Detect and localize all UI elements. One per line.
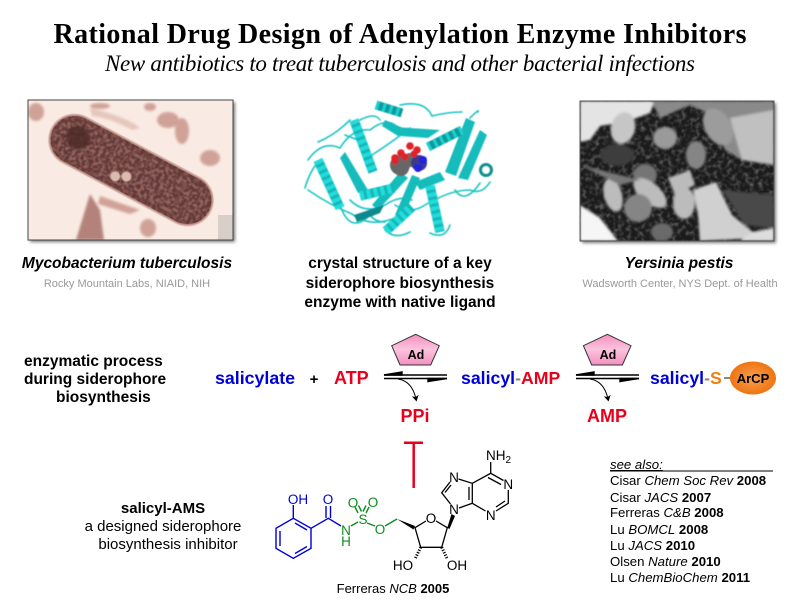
caption: Mycobacterium tuberculosis: Mycobacterium tuberculosis (22, 255, 232, 272)
ribose: O (426, 511, 436, 526)
references: see also: Cisar JACS 2007 (610, 490, 711, 505)
enzyme: Ad pentagon 1: Ad (408, 348, 424, 362)
adenine (442, 448, 513, 523)
salicyl moiety: OH (288, 492, 308, 507)
reactant: ATP: ATP (334, 368, 369, 388)
adenine: N (486, 508, 496, 523)
product: AMP: AMP (587, 406, 627, 426)
enzyme: Ad pentagon 1 (392, 334, 439, 365)
sulfamate linker: H (341, 534, 351, 549)
sulfamate linker (341, 495, 385, 549)
caption: crystal structure (304, 255, 496, 311)
caption: crystal structure: siderophore biosynthesis (306, 275, 494, 292)
sulfamate linker: O (348, 496, 358, 510)
enzyme: Ad pentagon 2: Ad (600, 348, 616, 362)
sulfamate linker: O (375, 522, 385, 537)
references: see also: Ferreras C&B 2008 (610, 505, 724, 520)
salicyl moiety: O (323, 492, 333, 507)
salicyl moiety (276, 492, 341, 558)
references: see also: Olsen Nature 2010 (610, 554, 721, 569)
references: see also: Cisar Chem Soc Rev 2008 (610, 473, 766, 488)
carrier protein: ArCP (724, 362, 776, 394)
references: see also: see also: (610, 457, 663, 472)
image: bound ligand spheres (390, 142, 427, 176)
citation: Ferreras NCB 2005: Ferreras NCB 2005 (337, 581, 449, 596)
equilibrium arrow 2 (576, 372, 639, 399)
caption: Yersinia pestis: Yersinia pestis (625, 255, 734, 272)
label: enzymatic process: during siderophore (24, 371, 166, 388)
sulfamate linker: N (341, 523, 351, 538)
ribose (385, 511, 467, 573)
title: Rational Drug Design of Adenylation Enzyme Inhibitors (54, 19, 747, 50)
label: enzymatic process (24, 353, 166, 406)
label: enzymatic process: biosynthesis (56, 389, 151, 406)
photo: Mycobacterium tuberculosis micrograph (28, 100, 235, 242)
label: salicyl-AMS: salicyl-AMS (121, 500, 205, 517)
adenine: 2 (506, 455, 512, 466)
product: salicyl-S: salicyl-S (650, 368, 722, 388)
credit: Wadsworth Center: Wadsworth Center, NYS Dept. of Health (582, 278, 778, 290)
sulfamate linker: O (368, 495, 378, 510)
references: see also: Lu BOMCL 2008 (610, 522, 708, 537)
equilibrium arrow 1 (384, 372, 447, 399)
reactant: salicylate: salicylate (215, 368, 295, 388)
sulfamate linker: S (358, 512, 368, 527)
caption: crystal structure: crystal structure of a key (308, 255, 492, 272)
subtitle: New antibiotics to treat tuberculosis and other bacterial infections (104, 51, 695, 76)
references: see also: Lu JACS 2010 (610, 538, 695, 553)
label: salicyl-AMS: biosynthesis inhibitor (98, 536, 238, 553)
intermediate: salicyl-AMP: salicyl-AMP (461, 368, 560, 388)
chemical structure: salicyl-AMS (276, 448, 513, 573)
label: enzymatic process: enzymatic process (24, 353, 163, 370)
carrier protein: ArCP: ArCP (737, 371, 770, 386)
adenine: N (503, 477, 513, 492)
plus sign: + (310, 371, 319, 388)
inhibition symbol (404, 443, 423, 488)
reaction scheme (215, 334, 776, 426)
photo: Yersinia pestis micrograph (580, 101, 776, 243)
label: salicyl-AMS (85, 500, 241, 553)
references: see also (610, 457, 773, 585)
ribose: OH (447, 558, 467, 573)
credit: Rocky Mountain Labs: Rocky Mountain Labs, NIAID, NIH (44, 278, 210, 290)
adenine: N (449, 502, 459, 517)
caption: crystal structure: enzyme with native ligand (304, 294, 496, 311)
label: salicyl-AMS: a designed siderophore (85, 518, 241, 535)
ribose: HO (393, 558, 413, 573)
product: PPi: PPi (400, 406, 430, 426)
image: protein crystal structure (305, 104, 492, 236)
adenine: N (449, 470, 459, 485)
enzyme: Ad pentagon 2 (583, 334, 631, 365)
references: see also: Lu ChemBioChem 2011 (610, 570, 750, 585)
adenine: NH (486, 448, 506, 463)
